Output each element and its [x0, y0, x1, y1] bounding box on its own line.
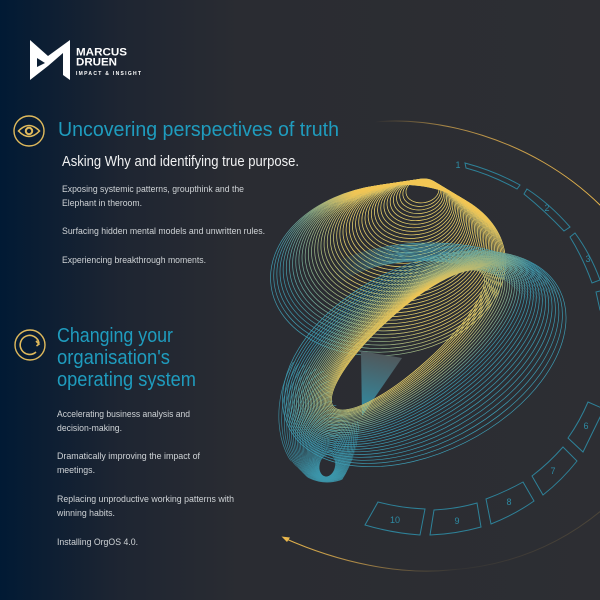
text block: second section bullets: winning habits.: [56, 508, 115, 519]
text block: first section bullets: [62, 184, 265, 266]
heading: changing your organisation's operating system: organisation's: [57, 347, 170, 369]
ring of numbered segments: [365, 163, 600, 535]
text block: second section bullets: meetings.: [57, 465, 95, 476]
logo: IMPACT & INSIGHT: [76, 71, 141, 77]
segment numbers: 6: [583, 421, 589, 431]
icon: eye: [14, 116, 44, 146]
segment numbers: 10: [390, 515, 400, 525]
text block: first section bullets: Experiencing breakthrough moments.: [62, 255, 206, 266]
heading: changing your organisation's operating system: [57, 325, 196, 391]
text block: second section bullets: Replacing unproductive working patterns with: [57, 494, 234, 505]
text block: second section bullets: Accelerating business analysis and: [57, 409, 190, 420]
segment numbers: 9: [454, 516, 460, 526]
text block: first section bullets: Exposing systemic patterns, groupthink and the: [62, 184, 244, 195]
text block: second section bullets: decision-making.: [57, 423, 122, 434]
icon: cycle: [15, 330, 45, 360]
segment numbers: 8: [506, 497, 512, 507]
heading: changing your organisation's operating system: Changing your: [57, 325, 173, 347]
heading: uncovering perspectives of truth: Uncovering perspectives of truth: [58, 119, 339, 141]
segment numbers: [390, 160, 591, 526]
text block: first section bullets: Elephant in theroom.: [62, 198, 142, 209]
segment numbers: 7: [550, 466, 556, 476]
text block: second section bullets: Dramatically improving the impact of: [57, 451, 200, 462]
arrow: upper arc: [375, 121, 600, 207]
subheading: asking why: Asking Why and identifying true purpose.: [62, 154, 299, 170]
segment numbers: 3: [585, 254, 591, 264]
segment numbers: 2: [544, 203, 550, 213]
logo: DRUEN: [76, 56, 117, 68]
logo: [30, 40, 141, 80]
segment numbers: 1: [455, 160, 461, 170]
text block: second section bullets: Installing OrgOS 4.0.: [57, 537, 138, 548]
text block: first section bullets: Surfacing hidden mental models and unwritten rules.: [62, 226, 265, 237]
spirograph figure: [270, 178, 566, 482]
logo: MARCUS: [76, 46, 127, 58]
heading: changing your organisation's operating system: operating system: [57, 369, 196, 391]
text block: second section bullets: [56, 409, 234, 548]
arrow: lower arc: [282, 510, 600, 571]
